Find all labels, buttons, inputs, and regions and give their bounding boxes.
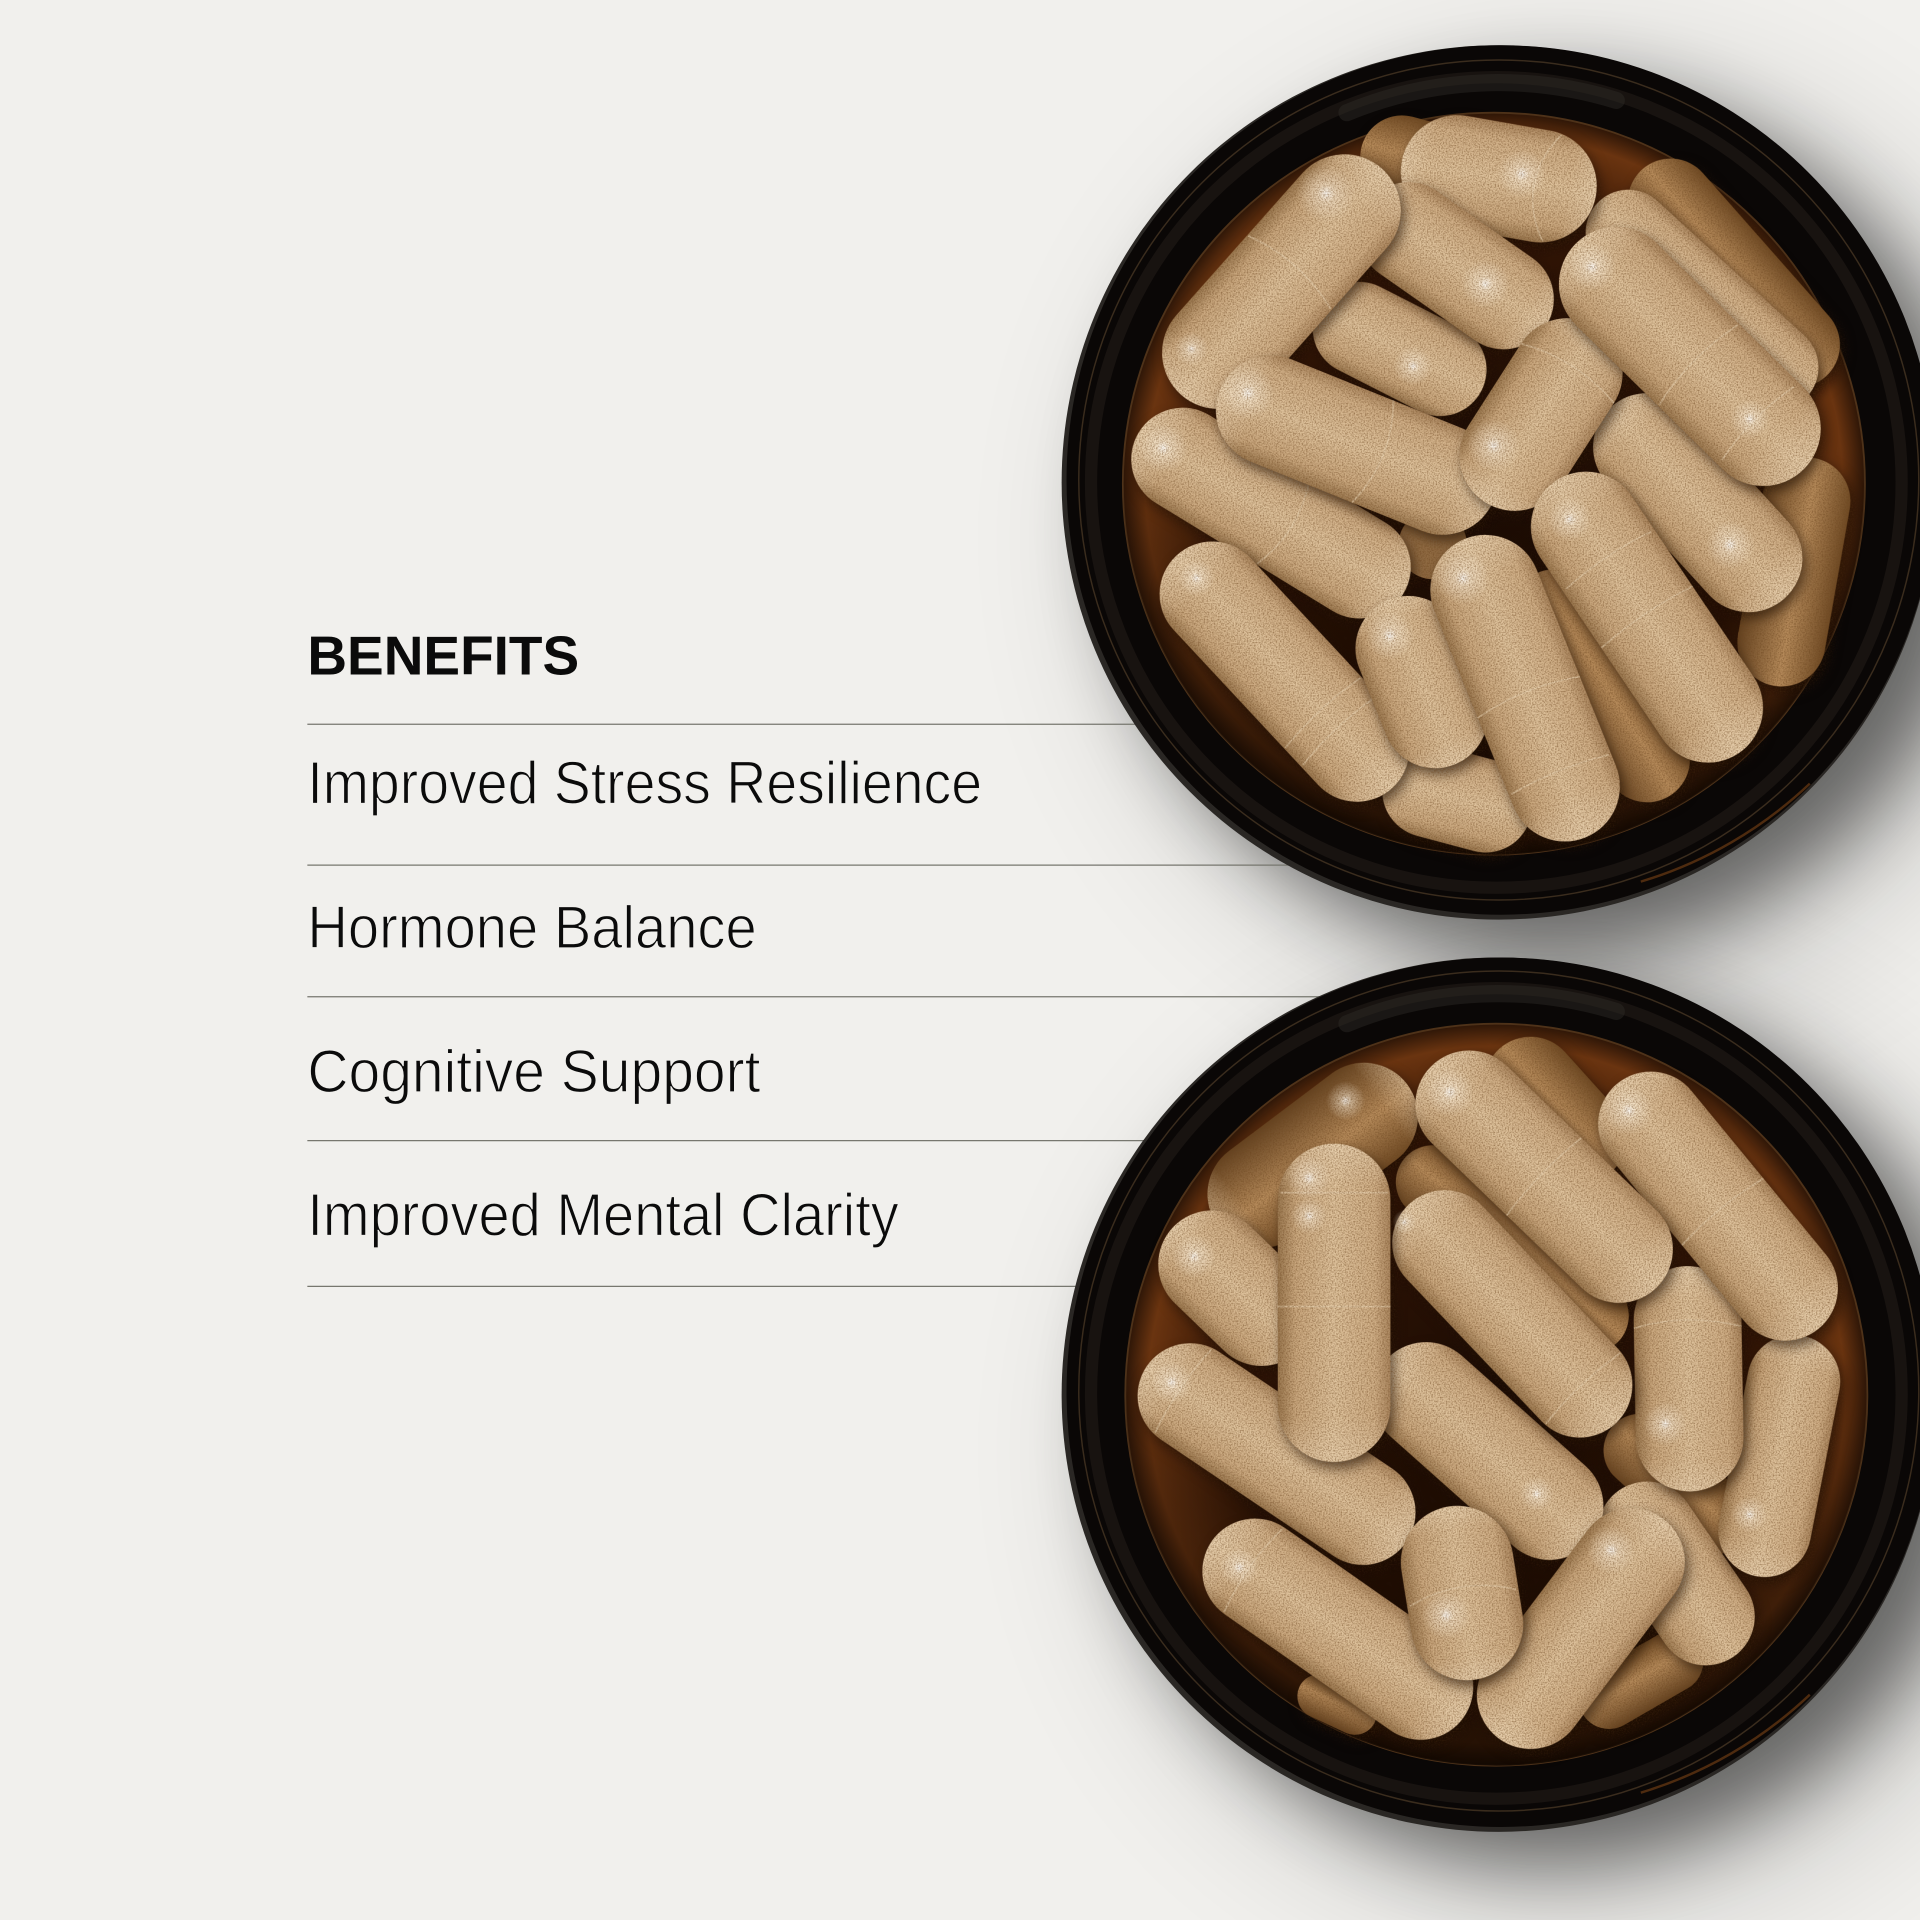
- capsule: [1350, 1320, 1626, 1582]
- capsule: [1579, 1462, 1774, 1684]
- capsule: [1438, 297, 1644, 532]
- benefits heading: BENEFITS: [307, 625, 579, 687]
- amber jar interior: [1123, 113, 1865, 855]
- jar rim: [1062, 958, 1920, 1832]
- capsule: [1633, 1265, 1744, 1492]
- benefit: hormone balance: Hormone Balance: [307, 894, 757, 961]
- capsule: [1610, 141, 1858, 405]
- capsule: [1278, 1144, 1390, 1462]
- capsule: [1338, 162, 1573, 369]
- capsule: [1510, 450, 1784, 784]
- capsules: [1112, 106, 1858, 863]
- capsule: [1186, 1041, 1439, 1269]
- capsule: [1136, 1188, 1338, 1388]
- capsule: [1571, 371, 1825, 634]
- benefits list: [307, 724, 1322, 1286]
- top jar: [1062, 45, 1920, 920]
- capsule: [1351, 106, 1514, 225]
- capsule: [1577, 1050, 1859, 1362]
- capsule: [1112, 388, 1430, 638]
- capsule: [1414, 518, 1637, 858]
- jar rim: [1062, 45, 1920, 920]
- capsule: [1496, 553, 1706, 818]
- capsule: [1398, 511, 1467, 579]
- benefit: cognitive support: Cognitive Support: [307, 1038, 761, 1105]
- capsules: [1117, 1018, 1859, 1771]
- capsule: [1340, 580, 1504, 784]
- capsule: [1568, 172, 1836, 428]
- capsule: [1465, 1018, 1645, 1204]
- capsule: [1588, 1399, 1767, 1570]
- capsule: [1199, 339, 1514, 551]
- bottom jar: [1062, 958, 1920, 1832]
- capsule: [1372, 734, 1543, 863]
- benefit: mental clarity: Improved Mental Clarity: [307, 1182, 899, 1249]
- capsule: [1139, 131, 1424, 432]
- capsule: [1535, 203, 1845, 510]
- capsule: [1182, 1498, 1494, 1760]
- capsule: [1567, 1620, 1714, 1740]
- capsule: [1138, 520, 1431, 824]
- capsule: [1455, 1487, 1706, 1771]
- capsule: [1710, 1327, 1848, 1585]
- capsule: [1730, 450, 1857, 693]
- capsule: [1297, 266, 1503, 432]
- capsule: [1117, 1323, 1436, 1585]
- capsule: [1393, 1028, 1695, 1325]
- capsule: [1393, 1498, 1531, 1688]
- capsule: [1370, 1168, 1654, 1459]
- benefit: stress resilience: Improved Stress Resilience: [307, 749, 982, 816]
- capsule: [1392, 106, 1606, 251]
- amber jar interior: [1125, 1024, 1867, 1766]
- bowl shadows: [1109, 83, 1920, 1886]
- capsule: [1381, 1130, 1644, 1368]
- capsule: [1290, 1667, 1384, 1742]
